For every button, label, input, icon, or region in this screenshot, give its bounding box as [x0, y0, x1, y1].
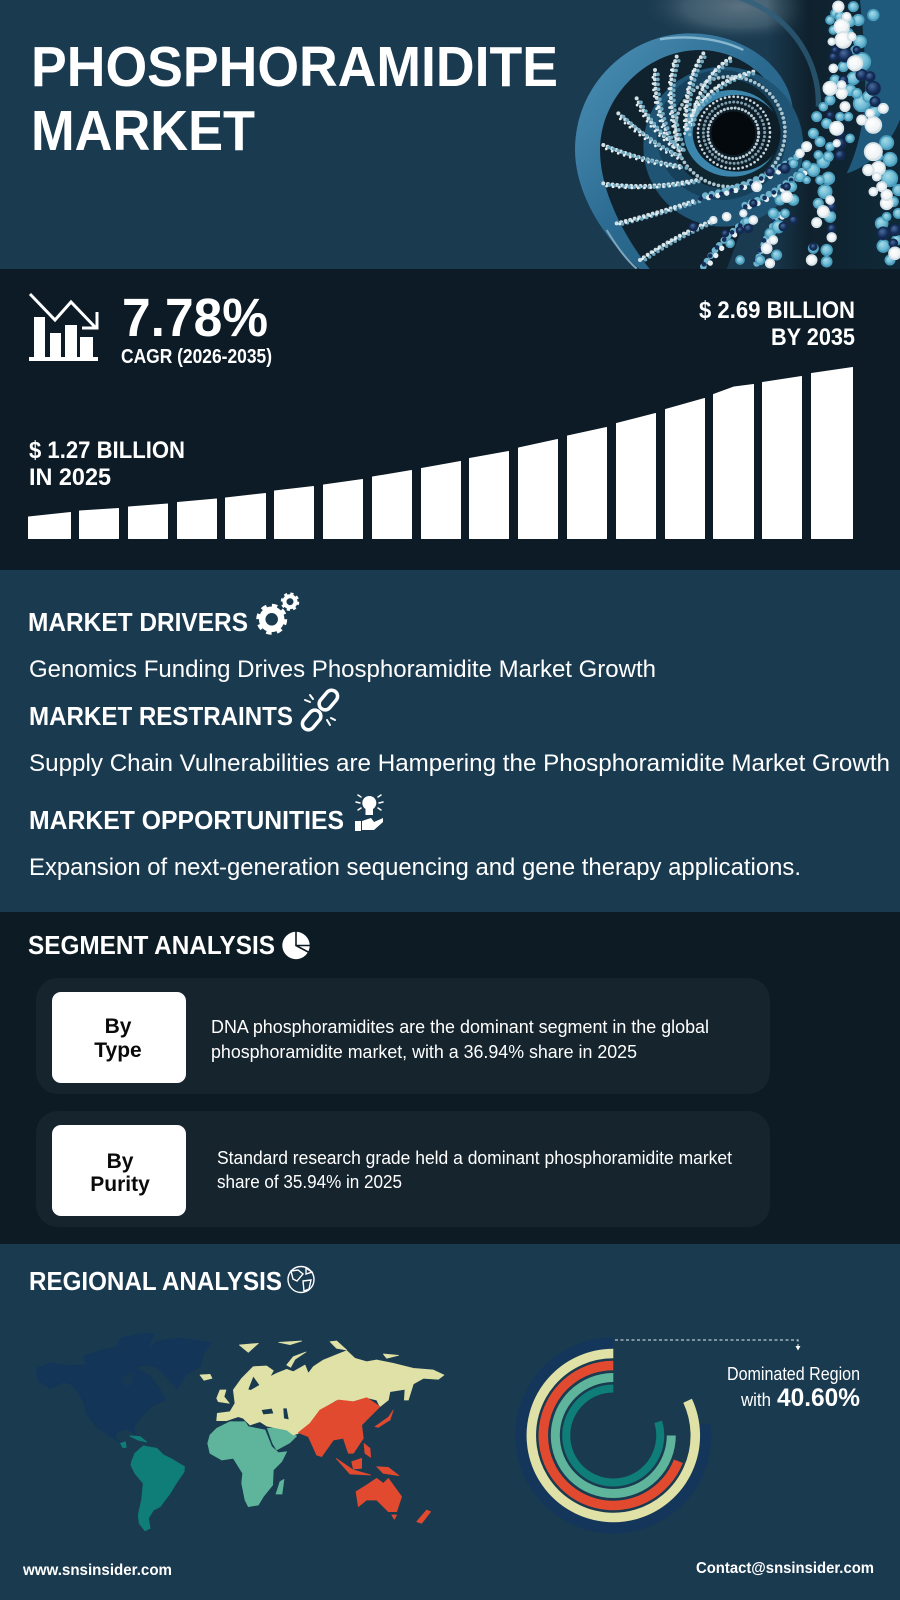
panel: segment analysis: [0, 912, 900, 1244]
icon: gears: [258, 594, 298, 633]
CAGR value: CAGR (2026-2035): [121, 346, 272, 368]
arrow: dashed callout: [615, 1340, 800, 1350]
text: purity description: [217, 1148, 732, 1192]
callout: dominated region: with: [740, 1390, 771, 1410]
label box: by purity: By: [107, 1150, 134, 1173]
bar chart: market growth: [28, 368, 852, 538]
heading: market restraints: MARKET RESTRAINTS: [29, 701, 293, 731]
illustration: DNA spiral: [575, 0, 900, 269]
heading: regional analysis: REGIONAL ANALYSIS: [29, 1266, 282, 1296]
label box: by purity: [52, 1125, 186, 1216]
hudson bay: [121, 1373, 134, 1387]
region: Asia Pacific: [298, 1398, 431, 1523]
icon: pie chart: [282, 930, 312, 959]
label box: by purity: Purity: [90, 1173, 150, 1196]
seas: [248, 1377, 289, 1419]
card: by purity: [36, 1111, 770, 1227]
footer: website: www.snsinsider.com: [22, 1562, 172, 1579]
card: by type: [36, 978, 770, 1094]
label box: by type: By: [105, 1015, 132, 1038]
region: North America: [37, 1334, 212, 1443]
label: 2025 value: $ 1.27 BILLION: [29, 437, 185, 464]
heading: market drivers: MARKET DRIVERS: [28, 607, 248, 637]
callout: dominated region: 40.60%: [777, 1384, 860, 1412]
label box: by type: [52, 992, 186, 1083]
callout: dominated region: Dominated Region: [727, 1364, 860, 1384]
panel: market size: [0, 269, 900, 570]
callout: dominated region: [727, 1364, 860, 1412]
title: PHOSPHORAMIDITE: [31, 35, 558, 99]
footer: contact: Contact@snsinsider.com: [696, 1560, 874, 1577]
icon: globe: [288, 1266, 314, 1292]
label: 2025 value: IN 2025: [29, 464, 111, 491]
label: 2035 value: BY 2035: [771, 324, 855, 351]
label: 2035 value: [699, 297, 855, 351]
label box: by type: Type: [94, 1039, 142, 1062]
heading: segment analysis: SEGMENT ANALYSIS: [28, 930, 275, 960]
text: purity description: share of 35.94% in 2025: [217, 1172, 402, 1192]
title: [31, 35, 558, 163]
donut chart: regional shares: [521, 1343, 706, 1528]
region: Africa and Middle East: [208, 1422, 297, 1507]
text: restraint: Supply Chain Vulnerabilities are Hampering the Phosphoramidite Market Growth: [29, 750, 890, 777]
heading: market opportunities: MARKET OPPORTUNITIES: [29, 805, 344, 835]
label: 2025 value: [29, 437, 185, 491]
icon: broken link: [300, 688, 340, 732]
text: type description: DNA phosphoramidites are the dominant segment in the global: [211, 1017, 709, 1037]
text: type description: phosphoramidite market, with a 36.94% share in 2025: [211, 1042, 637, 1062]
panel: market dynamics: [0, 570, 900, 912]
icon: lightbulb in hand: [355, 795, 383, 831]
panel: regional analysis: [0, 1244, 900, 1600]
text: driver: Genomics Funding Drives Phosphoramidite Market Growth: [29, 656, 656, 683]
title: MARKET: [31, 99, 255, 163]
panel: header: [0, 0, 900, 269]
text: purity description: Standard research grade held a dominant phosphoramidite market: [217, 1148, 732, 1168]
world map: [37, 1334, 444, 1531]
label: 2035 value: $ 2.69 BILLION: [699, 297, 855, 324]
icon: growth chart: [29, 294, 98, 361]
CAGR value: 7.78%: [122, 288, 268, 348]
region: South America: [121, 1436, 184, 1531]
region: Europe and Northern Asia: [200, 1341, 444, 1435]
text: opportunity: Expansion of next-generation sequencing and gene therapy applications.: [29, 854, 801, 881]
text: type description: [211, 1017, 709, 1062]
